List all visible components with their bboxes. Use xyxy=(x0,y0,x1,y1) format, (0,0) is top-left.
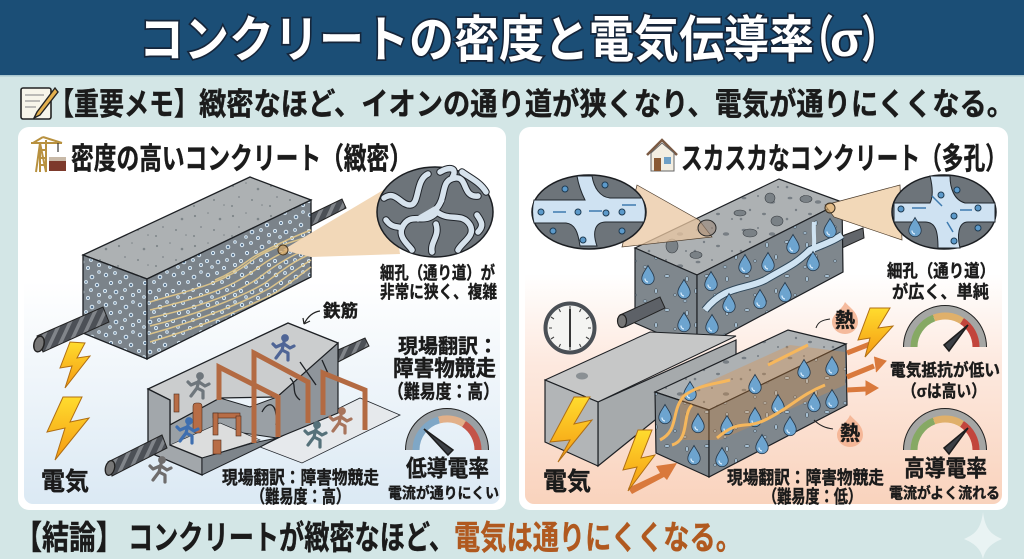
top face xyxy=(148,323,338,425)
label: electricity: 電気 xyxy=(41,468,89,496)
label: wide pores: が広く、単純 xyxy=(892,282,989,302)
magnifier beam left xyxy=(622,185,712,247)
icon: lightning entering xyxy=(623,430,655,491)
cutaway block: obstacle race xyxy=(104,323,400,482)
gauge label: high conductivity xyxy=(889,455,1000,502)
label: low resistance: 電気抵抗が低い xyxy=(890,360,1000,380)
conclusion line: 【結論】 xyxy=(15,519,123,556)
icon: lightning near plain block xyxy=(550,397,592,462)
current lines xyxy=(660,345,825,445)
arrows: current leaving block xyxy=(847,344,886,395)
label: field translation porous: （難易度：低） xyxy=(763,487,862,507)
icon: lightning lower xyxy=(47,397,89,460)
arrow: current entering block xyxy=(628,463,677,494)
sparkle mark xyxy=(964,512,1002,559)
room back wall xyxy=(170,397,277,458)
icon: notepad and pencil xyxy=(21,88,58,119)
icon: house xyxy=(647,140,677,171)
gauge: high conductivity xyxy=(908,413,982,454)
magnifier cone xyxy=(283,186,400,257)
water drops xyxy=(659,404,671,424)
magnifier: wide pores right xyxy=(892,175,996,249)
gauge: low resistance xyxy=(908,310,982,351)
interior floor xyxy=(170,423,260,458)
water drops xyxy=(642,266,654,285)
bottom face xyxy=(202,438,277,475)
magnifier: wide pores left xyxy=(532,175,646,249)
label: field translation (large): （難易度：高） xyxy=(388,381,499,403)
label: field translation (large) xyxy=(388,335,499,403)
label: low resistance: （σは高い） xyxy=(902,381,986,401)
label: narrow pores: 細孔（通り道）が xyxy=(380,263,495,283)
gauge label: high conductivity: 高導電率 xyxy=(904,455,987,481)
warm glow xyxy=(680,345,845,440)
label: rebar with arrow xyxy=(303,301,358,324)
label: field translation (small): （難易度：高） xyxy=(251,487,350,507)
title banner: コンクリートの密度と電気伝導率 xyxy=(139,12,814,68)
gauge label: high conductivity: 電流がよく流れる xyxy=(889,484,1000,502)
panel heading: dense: 密度の高いコンクリート（緻密） xyxy=(71,143,412,176)
title banner: （ xyxy=(796,12,834,68)
panel: dense concrete xyxy=(18,127,506,510)
magnifier spot left xyxy=(698,220,716,236)
label: narrow pores xyxy=(380,263,497,302)
badge: heat bottom xyxy=(814,415,863,447)
rebar behind xyxy=(338,338,369,362)
obstacle frames xyxy=(219,353,365,443)
gauge label: low conductivity xyxy=(388,455,499,502)
outer end face xyxy=(148,389,202,475)
icon: clock xyxy=(546,304,594,352)
rebar front xyxy=(108,435,167,476)
label: wide pores xyxy=(887,261,995,302)
panel: porous concrete xyxy=(519,127,1008,510)
badge: heat bottom: 熱 xyxy=(840,422,860,445)
obstacle posts xyxy=(174,394,241,454)
label: field translation (large): 障害物競走 xyxy=(393,356,496,381)
label: field translation (small): 現場翻訳：障害物競走 xyxy=(222,468,379,488)
dense concrete block xyxy=(83,177,346,359)
label: electricity (porous): 電気 xyxy=(543,468,591,496)
label: field translation (small) xyxy=(222,468,379,507)
label: field translation (large): 現場翻訳： xyxy=(398,335,498,358)
plain concrete block xyxy=(545,332,736,466)
rebar left end xyxy=(32,307,109,353)
title banner: ） xyxy=(861,12,899,68)
conclusion line xyxy=(15,519,742,556)
label: field translation porous: 現場翻訳：障害物競走 xyxy=(727,468,884,488)
label: rebar with arrow: 鉄筋 xyxy=(323,301,358,321)
icon: lightning exit xyxy=(858,308,893,357)
label: wide pores: 細孔（通り道） xyxy=(887,261,995,281)
magnifier: narrow pores xyxy=(377,167,493,257)
memo text: 【重要メモ】 xyxy=(49,87,199,122)
conclusion line: コンクリートが緻密なほど、 xyxy=(128,519,454,556)
magnifier beam right xyxy=(825,185,902,240)
porous block with current xyxy=(655,330,847,477)
badge: heat top xyxy=(816,302,858,334)
rebar right end xyxy=(311,199,346,226)
floor extension xyxy=(260,398,400,463)
ion paths: golden flow lines xyxy=(150,230,311,342)
badge: heat top: 熱 xyxy=(835,309,855,332)
large surface holes xyxy=(666,193,812,258)
gauge: low conductivity xyxy=(410,413,484,455)
title banner xyxy=(0,0,1024,76)
icon: crane xyxy=(31,137,66,172)
side wall xyxy=(277,343,338,438)
conclusion line: 電気は通りにくくなる。 xyxy=(454,519,742,556)
label: low resistance xyxy=(890,360,1000,401)
magnifier spot right xyxy=(825,203,835,213)
icon: lightning upper xyxy=(60,342,90,388)
runners xyxy=(273,335,294,360)
label: field translation porous xyxy=(727,468,884,507)
label: narrow pores: 非常に狭く、複雑 xyxy=(380,282,497,302)
gauge label: low conductivity: 電流が通りにくい xyxy=(388,484,499,502)
cracks xyxy=(262,360,330,425)
rebar stub xyxy=(618,297,665,328)
gauge label: low conductivity: 低導電率 xyxy=(406,455,489,481)
porous block upper xyxy=(635,179,864,350)
magnifier spot xyxy=(278,245,288,255)
title banner: σ xyxy=(830,14,863,67)
